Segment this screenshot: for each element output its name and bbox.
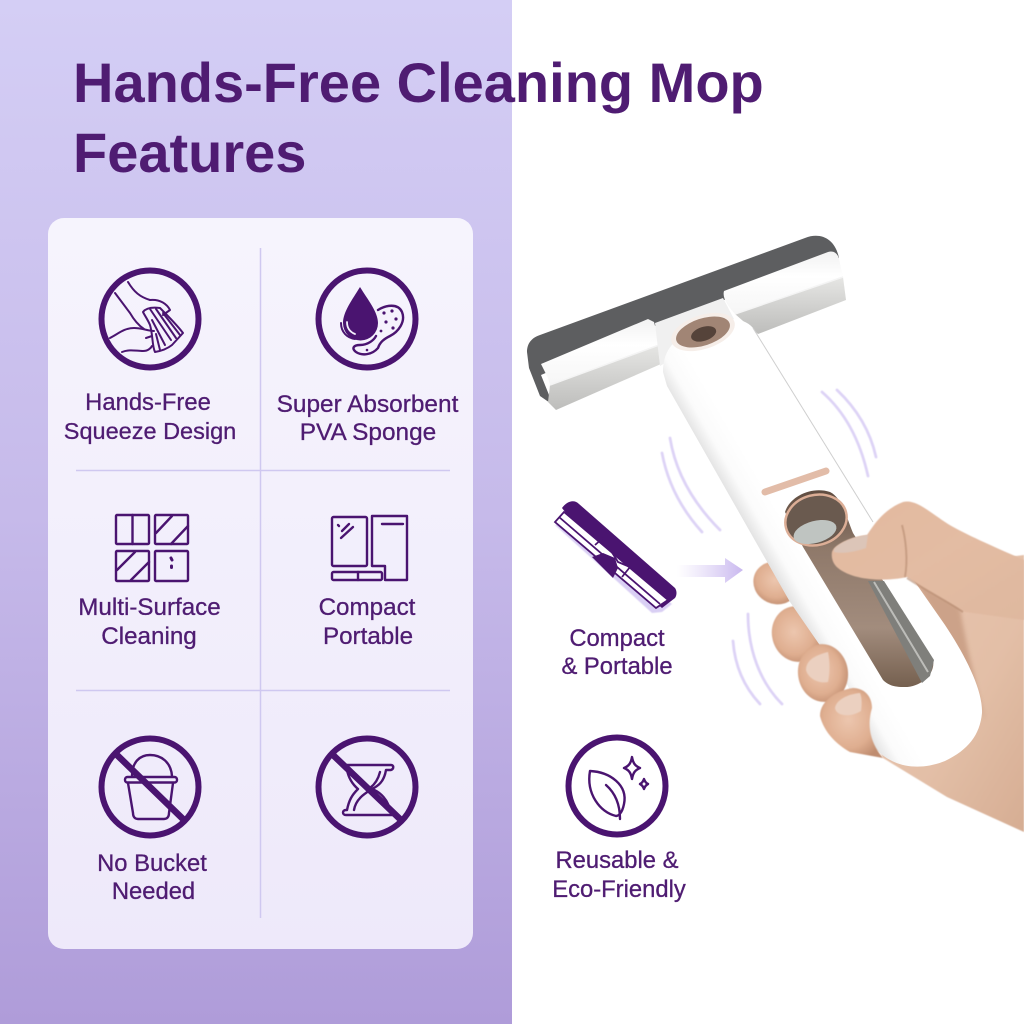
feature: super absorbent sponge <box>277 270 459 446</box>
label <box>97 850 207 905</box>
panel: feature grid <box>48 218 473 949</box>
top pivot ring <box>666 306 740 358</box>
hand palm behind handle <box>860 555 1024 832</box>
mop handle <box>663 319 982 767</box>
feature: compact portable <box>319 516 416 650</box>
arrow <box>677 558 743 583</box>
icon: crossed-out hourglass <box>318 738 416 836</box>
label: Cleaning <box>101 623 197 650</box>
label: No Bucket <box>97 850 207 877</box>
label <box>552 847 686 903</box>
label: Squeeze Design <box>64 418 236 444</box>
rose-gold indicator bar <box>765 471 826 492</box>
label: Portable <box>323 623 413 650</box>
palm shadow beside handle <box>915 582 985 720</box>
title: Features <box>73 121 306 184</box>
ring and little fingers <box>794 641 883 758</box>
label: Hands-Free <box>85 389 211 416</box>
feature: multi-surface cleaning <box>78 515 221 650</box>
vibration motion arcs <box>662 390 876 704</box>
label: Multi-Surface <box>78 594 221 621</box>
handle right edge line <box>753 328 873 522</box>
fingernails <box>806 652 862 715</box>
index and middle fingers behind handle <box>746 554 828 668</box>
label: compact and portable <box>561 625 673 680</box>
thumb <box>832 502 1024 620</box>
thumbnail <box>834 535 868 553</box>
handle slot window <box>785 490 934 687</box>
label: PVA Sponge <box>300 419 436 446</box>
left lavender background panel <box>0 0 512 1024</box>
label <box>64 389 236 444</box>
title: Hands-Free Cleaning Mop <box>73 51 764 114</box>
mop head <box>527 236 846 410</box>
label: Eco-Friendly <box>552 876 686 903</box>
feature: hands-free squeeze design <box>64 270 236 444</box>
icon: crossed-out bucket <box>102 738 198 836</box>
label: compact and portable: Compact <box>569 625 665 652</box>
label <box>277 391 459 446</box>
icon: folded mop <box>555 501 676 613</box>
label <box>78 594 221 650</box>
lens ring <box>780 488 852 552</box>
label: Compact <box>319 594 416 621</box>
title <box>73 51 764 184</box>
label: Reusable & <box>555 847 679 874</box>
icon: hands wringing cloth <box>102 270 198 368</box>
icon: mirror and cabinet <box>332 516 407 580</box>
icon: leaf with sparkles <box>568 738 666 834</box>
product photo: mop held in hand <box>527 236 1024 832</box>
label <box>319 594 416 650</box>
label: compact and portable: & Portable <box>561 653 673 680</box>
label: Needed <box>112 878 195 905</box>
icon: four surface tiles <box>116 515 188 581</box>
label: Super Absorbent <box>277 391 459 418</box>
feature: no bucket needed <box>97 738 207 905</box>
icon: water drop and sponge <box>318 270 416 368</box>
thumb crease <box>902 525 963 612</box>
feature: reusable eco-friendly <box>552 738 686 903</box>
